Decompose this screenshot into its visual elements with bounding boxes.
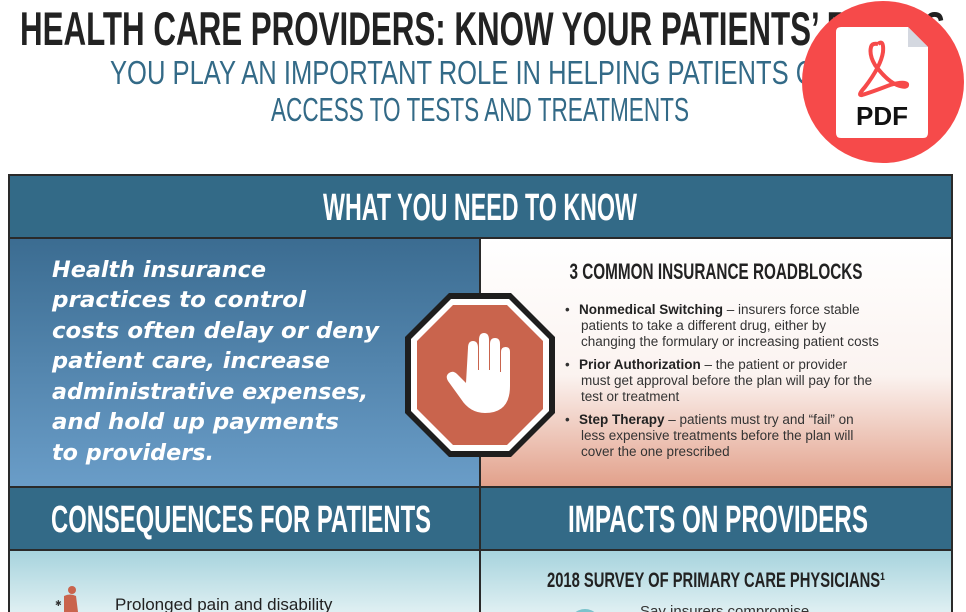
panel: consequences header: CONSEQUENCES FOR PATIENTS [51, 499, 431, 541]
panel: roadblocks: Nonmedical Switching – insurers force stable [579, 302, 860, 317]
panel: roadblocks: Prior Authorization – the patient or provider [579, 357, 848, 372]
panel: insurance practices: costs often delay or deny [52, 319, 381, 344]
panel: insurance practices: administrative expenses, [52, 380, 368, 405]
icon: pdf badge [802, 1, 964, 163]
panel: roadblocks: • [565, 357, 570, 372]
panel: roadblocks: must get approval before the plan will pay for the [581, 373, 872, 388]
panel: insurance practices: practices to control [51, 288, 306, 313]
panel: what you need to know header [9, 175, 952, 238]
panel: roadblocks: Step Therapy – patients must try and “fail” on [579, 412, 854, 427]
icon: person in pain [55, 586, 78, 612]
panel: roadblocks: changing the formulary or increasing patient costs [581, 334, 879, 349]
subtitle [110, 54, 945, 128]
panel: insurance practices: and hold up payments [52, 410, 339, 435]
panel: roadblocks [480, 238, 952, 487]
panel: roadblocks: patients to take a different drug, either by [581, 318, 826, 333]
panel: consequences header [9, 487, 480, 550]
panel: consequences body [9, 550, 480, 612]
panel: impacts header [480, 487, 952, 550]
panel: roadblocks: • [565, 302, 570, 317]
panel: roadblocks: test or treatment [581, 389, 680, 404]
panel: roadblocks: cover the one prescribed [581, 444, 730, 459]
subtitle: ACCESS TO TESTS AND TREATMENTS [271, 91, 689, 128]
icon: person in pain: ✱ [55, 599, 62, 608]
panel: impacts body [480, 550, 952, 612]
panel: roadblocks: less expensive treatments before the plan will [581, 428, 853, 443]
panel: what you need to know header: WHAT YOU NEED TO KNOW [323, 187, 637, 229]
panel: insurance practices: Health insurance [52, 258, 266, 283]
panel: insurance practices: patient care, increase [51, 349, 330, 374]
icon: pdf badge: PDF [856, 101, 908, 131]
panel: insurance practices: to providers. [52, 441, 214, 466]
icon: stop sign [405, 293, 555, 457]
panel: roadblocks: • [565, 412, 570, 427]
panel: insurance practices [9, 238, 480, 487]
